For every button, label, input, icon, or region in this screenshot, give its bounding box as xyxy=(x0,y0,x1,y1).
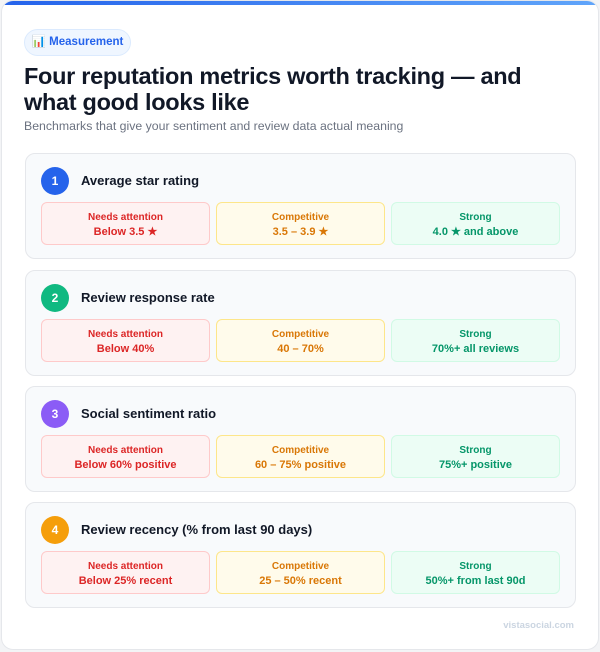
box: strong xyxy=(391,202,560,245)
box: strong: 4.0 ★ and above xyxy=(433,226,518,238)
box: needs attention: Needs attention xyxy=(88,445,163,456)
box: strong: 70%+ all reviews xyxy=(432,343,519,355)
heading 4: Review recency (% from last 90 days) xyxy=(81,522,312,537)
subtitle: Benchmarks that give your sentiment and review data actual meaning xyxy=(24,119,403,133)
box: competitive: Competitive xyxy=(272,329,329,340)
box: strong: 75%+ positive xyxy=(439,459,512,471)
box: needs attention: Below 60% positive xyxy=(74,459,177,471)
panel: average star rating xyxy=(25,153,576,259)
box: needs attention: Needs attention xyxy=(88,212,163,223)
box: competitive: Competitive xyxy=(272,561,329,572)
heading 1: Average star rating xyxy=(81,173,199,188)
pill: Measurement xyxy=(24,29,131,56)
box: competitive xyxy=(216,551,385,594)
badge 2 xyxy=(41,284,69,312)
box: strong: 50%+ from last 90d xyxy=(426,575,525,587)
box: needs attention: Needs attention xyxy=(88,561,163,572)
badge 3: 3 xyxy=(52,407,58,421)
panel: social sentiment ratio xyxy=(25,386,576,492)
box: needs attention: Below 3.5 ★ xyxy=(94,226,157,238)
pill: Measurement: 📊 Measurement xyxy=(32,36,123,48)
box: competitive: 25 – 50% recent xyxy=(259,575,342,587)
box: competitive: 3.5 – 3.9 ★ xyxy=(273,226,328,238)
box: needs attention: Below 25% recent xyxy=(79,575,172,587)
box: strong: Strong xyxy=(459,561,492,572)
box: needs attention: Needs attention xyxy=(88,329,163,340)
box: strong xyxy=(391,435,560,478)
box: needs attention: Below 40% xyxy=(97,343,154,355)
box: needs attention xyxy=(41,319,210,362)
box: competitive xyxy=(216,202,385,245)
heading 3: Social sentiment ratio xyxy=(81,406,216,421)
box: competitive: 40 – 70% xyxy=(277,343,324,355)
badge 1: 1 xyxy=(52,174,58,188)
badge 4 xyxy=(41,516,69,544)
box: competitive: Competitive xyxy=(272,212,329,223)
box: competitive: 60 – 75% positive xyxy=(255,459,346,471)
heading 2: Review response rate xyxy=(81,290,215,305)
box: competitive xyxy=(216,435,385,478)
box: competitive: Competitive xyxy=(272,445,329,456)
box: competitive xyxy=(216,319,385,362)
box: strong: Strong xyxy=(459,445,492,456)
badge 4: 4 xyxy=(52,523,58,537)
box: strong xyxy=(391,319,560,362)
title: Four reputation metrics worth tracking — and what good looks like xyxy=(24,63,521,115)
box: strong: Strong xyxy=(459,329,492,340)
box: strong xyxy=(391,551,560,594)
footer: vistasocial.com xyxy=(503,620,574,631)
box: needs attention xyxy=(41,551,210,594)
box: needs attention xyxy=(41,202,210,245)
badge 3 xyxy=(41,400,69,428)
panel: review recency xyxy=(25,502,576,608)
badge 2: 2 xyxy=(52,291,58,305)
box: needs attention xyxy=(41,435,210,478)
box: strong: Strong xyxy=(459,212,492,223)
panel: review response rate xyxy=(25,270,576,376)
badge 1 xyxy=(41,167,69,195)
